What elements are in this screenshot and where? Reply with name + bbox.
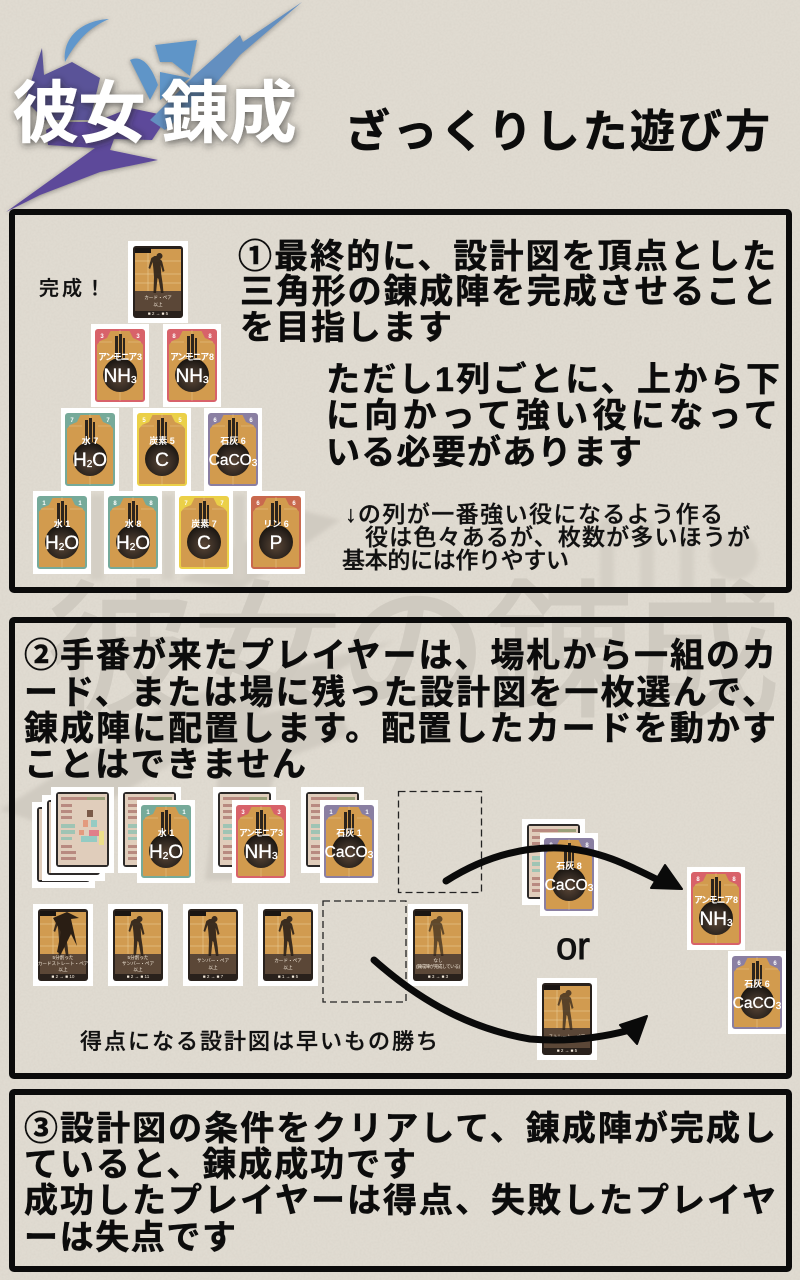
card: ammonia 3 (91, 324, 149, 407)
pair: sheet and ammonia 3: NH (244, 842, 272, 863)
placed card: ammonia 8: アンモニア 8 (694, 895, 738, 905)
or: or (556, 926, 590, 968)
result text: ていると、錬成成功です (24, 1146, 416, 1184)
result text: 成功したプレイヤーは得点、失敗したプレイヤ (24, 1182, 776, 1220)
card: water 1: O (64, 533, 79, 554)
placed card: ammonia 8: 8 (696, 877, 700, 883)
card: ammonia 3: 3 (100, 334, 104, 340)
card: water 8: 8 (113, 501, 117, 507)
empty slot 2 (323, 901, 406, 1002)
card: water 1: 1 (42, 501, 46, 507)
card: top blueprint: 以上 (153, 301, 163, 307)
card: carbon 5: C (155, 450, 169, 471)
card: ammonia 8: アンモニア 8 (170, 352, 214, 362)
logo lightning shapes (6, 2, 302, 212)
condition text (326, 361, 780, 472)
option card pair: 8 (585, 843, 589, 849)
placed card: lime 6: 6 (737, 961, 741, 967)
pair: sheet and water 1: 2 (163, 851, 169, 862)
blueprint card 1: 5分割った (53, 954, 74, 961)
heading text: 三角形の錬成陣を完成させること (240, 273, 776, 311)
pair: sheet and water 1: 1 (182, 810, 186, 816)
panel frame (12, 620, 789, 1076)
pair: sheet and water 1: H (149, 842, 163, 863)
label: complete: 完成！ (39, 277, 105, 300)
card: water 8 (104, 491, 162, 574)
panel frame (12, 212, 789, 590)
card: ammonia 3: NH (103, 366, 131, 387)
card: water 8: O (135, 533, 150, 554)
card: carbon 7: 炭素 7 (191, 518, 217, 529)
pair: sheet and lime 1: 1 (365, 810, 369, 816)
arrow: top (446, 848, 682, 889)
blueprint card 1: 以上 (58, 966, 68, 972)
blueprint card 3: ■ 2 → ■ 7 (203, 974, 224, 979)
hint text: 基本的には作りやすい (342, 547, 569, 573)
placed card: lime 6: CaCO (733, 995, 776, 1012)
logo wordmark: 彼女 (12, 76, 146, 152)
option card pair (522, 819, 598, 916)
blueprint card 5: ■ 3 → ■ 3 (428, 974, 449, 979)
card: ammonia 3: 3 (136, 334, 140, 340)
logo (6, 2, 302, 212)
turn text (24, 636, 776, 784)
card: carbon 7 (175, 491, 233, 574)
blueprint card 4: 以上 (283, 964, 293, 970)
option card pair: 8 (549, 843, 553, 849)
panel 2: turn (12, 620, 789, 1076)
blueprint card 5: (錬成陣が完成している) (416, 963, 460, 970)
card: water 7: 2 (87, 459, 93, 470)
placed card: ammonia 8: NH (699, 909, 727, 930)
triangle of cards (33, 241, 305, 574)
card: lime 6 (204, 408, 262, 491)
card: phosphorus 6: 6 (256, 501, 260, 507)
card: water 7: 7 (70, 418, 74, 424)
result text (24, 1109, 776, 1257)
card: water 1: 水 1 (54, 518, 70, 529)
condition text: いる必要があります (326, 433, 642, 472)
card: water 8: 8 (149, 501, 153, 507)
panel 3: result (12, 1092, 789, 1269)
pair: sheet and water 1: 1 (146, 810, 150, 816)
card: water 1: 1 (78, 501, 82, 507)
card: water 8: 水 8 (125, 518, 141, 529)
placed card: ammonia 8: 3 (727, 918, 733, 929)
watermark logo (0, 495, 781, 880)
card: water 7: 7 (106, 418, 110, 424)
turn text: 錬成陣に配置します。配置したカードを動かす (24, 710, 776, 748)
blueprint card 2: 5分割った (128, 954, 149, 961)
pair: sheet and lime 1 (301, 787, 378, 883)
card: phosphorus 6: 6 (292, 501, 296, 507)
result text: ーは失点です (24, 1219, 236, 1257)
placed card: ammonia 8: 8 (732, 877, 736, 883)
card: lime 6: 6 (249, 418, 253, 424)
logo wordmark (12, 76, 297, 152)
watermark logo: 彼女の錬成 (46, 569, 781, 737)
placed card: lime 6: 3 (776, 1001, 782, 1012)
card: water 1: H (45, 533, 59, 554)
card: lime 6: 6 (213, 418, 217, 424)
blueprint card 5: なし (433, 957, 443, 963)
blueprint card 1 (33, 904, 93, 986)
blueprint card 2 (108, 904, 168, 986)
pair: sheet and ammonia 3: アンモニア 3 (239, 828, 283, 838)
blueprint card 4: カード・ペア (274, 958, 302, 964)
card: ammonia 3: アンモニア 3 (98, 352, 142, 362)
blueprint card 4 (258, 904, 318, 986)
logo wordmark: 錬成 (161, 76, 297, 152)
placed card: lime 6: 6 (773, 961, 777, 967)
hint text (342, 501, 750, 573)
card: ammonia 8: NH (175, 366, 203, 387)
placed card: lime 6 (728, 951, 786, 1034)
card: ammonia 3: 3 (131, 375, 137, 386)
card: phosphorus 6: P (270, 533, 282, 554)
turn text: ード、または場に残った設計図を一枚選んで、 (24, 674, 776, 712)
heading text: を目指します (240, 309, 452, 347)
card: ammonia 8: 8 (208, 334, 212, 340)
option blueprint card: ■ 2 → ■ 5 (557, 1048, 578, 1053)
panel frame (12, 1092, 789, 1269)
pair: sheet and water 1 (118, 787, 195, 883)
placed card: ammonia 8 (687, 867, 745, 950)
pair: sheet and lime 1: CaCO (325, 844, 368, 861)
option card pair: CaCO (545, 877, 588, 894)
condition text: ただし1列ごとに、上から下 (326, 361, 780, 399)
card: lime 6: CaCO (209, 452, 252, 469)
card: carbon 7: 7 (184, 501, 188, 507)
card: phosphorus 6: リン 6 (263, 519, 289, 529)
blueprint card 2: サンバー・ペア (122, 961, 154, 967)
condition text: に向かって強い役になって (326, 397, 778, 435)
pair: sheet and lime 1: 3 (368, 850, 374, 861)
caption: 得点になる設計図は早いもの勝ち (80, 1029, 438, 1054)
card: carbon 5: 5 (142, 418, 146, 424)
card: water 8: 2 (130, 542, 136, 553)
blueprint card 3: 以上 (208, 964, 218, 970)
heading text: ①最終的に、設計図を頂点とした (238, 238, 776, 276)
card: lime 6: 石灰 6 (220, 436, 246, 446)
arrow: bottom (374, 960, 647, 1044)
option card pair: 3 (588, 883, 594, 894)
pair: sheet and ammonia 3: 3 (277, 810, 281, 816)
panel 1: goal (12, 212, 789, 590)
deck of sheets (32, 787, 114, 888)
blueprint card 2: 以上 (133, 966, 143, 972)
blueprint card 5 (408, 904, 468, 986)
card: water 1: 2 (59, 542, 65, 553)
placed card: lime 6: 石灰 6 (744, 979, 770, 989)
blueprint card 2: ■ 2 → ■ 11 (127, 974, 150, 979)
option card pair: 石灰 8 (556, 861, 582, 871)
blueprint card 1: ■ 2 → ■ 10 (52, 974, 75, 979)
empty slot 1 (398, 792, 482, 892)
option blueprint card: ストレート・ペア (549, 1034, 586, 1040)
result text: ③設計図の条件をクリアして、錬成陣が完成し (24, 1109, 776, 1148)
card: lime 6: 3 (252, 458, 258, 469)
pair: sheet and ammonia 3: 3 (241, 810, 245, 816)
blueprint card 4: ■ 1 → ■ 5 (278, 974, 299, 979)
pair: sheet and water 1: 水 1 (158, 827, 174, 838)
option blueprint card (537, 978, 597, 1060)
card: water 1 (33, 491, 91, 574)
card: ammonia 8: 8 (172, 334, 176, 340)
card: top blueprint (128, 241, 188, 323)
turn text: ②手番が来たプレイヤーは、場札から一組のカ (24, 636, 776, 675)
blueprint card 1: カードストレート・ペア (38, 961, 89, 967)
card: water 7 (61, 408, 119, 491)
turn text: ことはできません (24, 746, 306, 784)
card: water 7: H (73, 450, 87, 471)
card: phosphorus 6 (247, 491, 305, 574)
card: ammonia 8 (163, 324, 221, 407)
pair: sheet and water 1: O (168, 842, 183, 863)
blueprint card 3 (183, 904, 243, 986)
card: carbon 5 (133, 408, 191, 491)
blueprint card 3: サンバー・ペア (197, 958, 229, 964)
card: top blueprint: カード・ペア (144, 295, 172, 301)
card: top blueprint: ■ 2 → ■ 5 (148, 311, 169, 316)
card: ammonia 8: 3 (203, 375, 209, 386)
pair: sheet and lime 1: 石灰 1 (336, 828, 362, 838)
heading text (238, 238, 776, 347)
card: carbon 7: C (197, 533, 211, 554)
card: water 7: O (92, 450, 107, 471)
pair: sheet and ammonia 3 (213, 787, 290, 883)
title: ざっくりした遊び方 (345, 106, 770, 157)
pair: sheet and ammonia 3: 3 (272, 851, 278, 862)
pair: sheet and lime 1: 1 (329, 810, 333, 816)
hint text: 役は色々あるが、枚数が多いほうが (365, 524, 750, 550)
card: water 8: H (116, 533, 130, 554)
card: carbon 5: 炭素 5 (149, 435, 175, 446)
card: water 7: 水 7 (82, 435, 98, 446)
card: carbon 7: 7 (220, 501, 224, 507)
hint text: ↓の列が一番強い役になるよう作る (345, 501, 723, 527)
card: carbon 5: 5 (178, 418, 182, 424)
